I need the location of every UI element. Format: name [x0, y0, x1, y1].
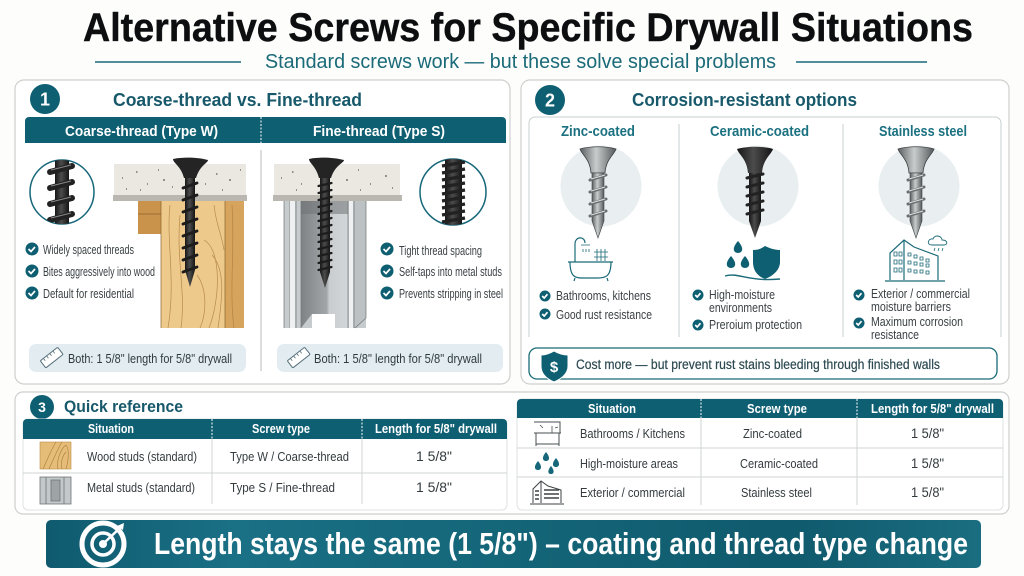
quick reference heading: Quick reference	[64, 397, 183, 416]
table: standard studs: Type S / Fine-thread	[230, 481, 335, 495]
icon: bathtub	[568, 238, 613, 281]
drywall board	[113, 164, 247, 201]
cost callout	[529, 348, 997, 382]
table: standard studs: 1 5/8"	[416, 448, 452, 464]
ceramic uses: Preroium protection	[709, 318, 802, 332]
section number 1	[30, 84, 60, 114]
icon: bathroom sink	[534, 422, 561, 446]
icon: shield with dollar	[541, 351, 568, 382]
stainless uses: Exterior / commercial	[871, 287, 970, 301]
coarse thread close-up	[30, 158, 94, 228]
cost callout: Cost more — but prevent rust stains bleeding through finished walls	[576, 357, 940, 372]
zinc heading: Zinc-coated	[561, 123, 635, 140]
icon: small building	[530, 481, 564, 504]
icon: shield with dollar: $	[550, 359, 559, 376]
panel: coarse-thread vs fine-thread	[15, 80, 510, 384]
icon: target with arrow	[82, 523, 124, 565]
column: stainless steel	[854, 123, 970, 342]
coarse thread benefits: Default for residential	[43, 287, 134, 301]
comparison header bar: Fine-thread (Type S)	[313, 123, 445, 140]
icon: water drops	[535, 452, 559, 474]
table: corrosion-resistant: Bathrooms / Kitchens	[580, 427, 685, 441]
table: corrosion-resistant: High-moisture areas	[580, 457, 678, 471]
length note left	[29, 344, 246, 372]
table: corrosion-resistant: Exterior / commercial	[580, 486, 685, 500]
fine thread benefits: Prevents stripping in steel	[399, 287, 503, 301]
panel 1 heading: Coarse-thread vs. Fine-thread	[113, 89, 362, 110]
zinc uses	[540, 289, 652, 322]
coarse screw	[173, 158, 208, 287]
table: corrosion-resistant: Screw type	[747, 401, 807, 416]
fine thread benefits: Tight thread spacing	[399, 244, 482, 258]
table: corrosion-resistant: Ceramic-coated	[740, 457, 818, 471]
table: standard studs: 1 5/8"	[416, 479, 452, 495]
panel 2 heading: Corrosion-resistant options	[632, 89, 857, 110]
stainless screw	[898, 147, 934, 238]
table: standard studs: Situation	[88, 421, 134, 436]
section number 2	[535, 85, 565, 115]
table: standard studs: Metal studs (standard)	[87, 481, 195, 495]
comparison header bar	[25, 117, 506, 143]
length note right	[277, 344, 503, 372]
section number 3: 3	[38, 399, 46, 415]
table: standard studs: Wood studs (standard)	[87, 450, 197, 464]
stainless heading: Stainless steel	[879, 123, 967, 140]
table: corrosion-resistant: Situation	[588, 401, 636, 416]
table: standard studs: Type W / Coarse-thread	[230, 450, 349, 464]
drywall board	[273, 164, 402, 201]
icon: wood swatch	[40, 442, 71, 469]
zinc screw	[580, 147, 616, 238]
title: Alternative Screws for Specific Drywall Situations	[83, 6, 973, 50]
ceramic uses: environments	[709, 301, 772, 315]
table: corrosion-resistant: Stainless steel	[741, 486, 812, 500]
table: corrosion-resistant: 1 5/8"	[911, 484, 944, 500]
table: standard studs: Length for 5/8" drywall	[375, 421, 497, 436]
ceramic heading: Ceramic-coated	[710, 123, 809, 140]
section number 2: 2	[545, 90, 555, 110]
length note right: Both: 1 5/8" length for 5/8" drywall	[314, 351, 482, 366]
zinc uses: Good rust resistance	[556, 308, 652, 322]
zinc uses: Bathrooms, kitchens	[556, 289, 651, 303]
ceramic uses: High-moisture	[709, 288, 775, 302]
section number 3	[30, 395, 54, 419]
panel: quick reference	[15, 392, 1009, 514]
icon: commercial building and rain cloud	[885, 236, 947, 281]
column: ceramic-coated	[692, 123, 809, 332]
comparison header bar: Coarse-thread (Type W)	[65, 123, 218, 140]
section number 1: 1	[40, 90, 50, 110]
bottom takeaway banner	[46, 520, 981, 568]
stainless uses: moisture barriers	[871, 300, 951, 314]
metal stud with drywall and fine screw	[273, 158, 402, 328]
fine thread close-up	[420, 158, 486, 228]
table: corrosion-resistant: 1 5/8"	[911, 425, 944, 441]
column: zinc-coated	[540, 123, 652, 322]
coarse thread benefits	[26, 242, 155, 301]
stainless uses: resistance	[871, 328, 919, 342]
stainless uses	[854, 287, 970, 342]
ceramic screw	[737, 147, 773, 238]
length note left: Both: 1 5/8" length for 5/8" drywall	[68, 351, 232, 366]
table: corrosion-resistant: Length for 5/8" drywall	[871, 401, 994, 416]
subtitle: Standard screws work — but these solve special problems	[265, 51, 776, 73]
fine thread benefits: Self-taps into metal studs	[399, 265, 502, 279]
table: corrosion-resistant	[517, 399, 1003, 510]
coarse thread benefits: Widely spaced threads	[43, 243, 134, 257]
wood stud with drywall and coarse screw	[113, 158, 247, 328]
coarse thread benefits: Bites aggressively into wood	[43, 265, 155, 279]
ceramic uses	[692, 288, 802, 332]
icon: metal stud swatch	[40, 477, 71, 504]
table: corrosion-resistant: Zinc-coated	[743, 427, 802, 441]
icon: water drops and shield	[725, 241, 780, 280]
fine screw	[309, 158, 344, 288]
stainless uses: Maximum corrosion	[871, 315, 963, 329]
table: corrosion-resistant: 1 5/8"	[911, 455, 944, 471]
table: standard studs	[23, 419, 507, 510]
table: standard studs: Screw type	[252, 421, 310, 436]
fine thread benefits	[380, 242, 503, 301]
